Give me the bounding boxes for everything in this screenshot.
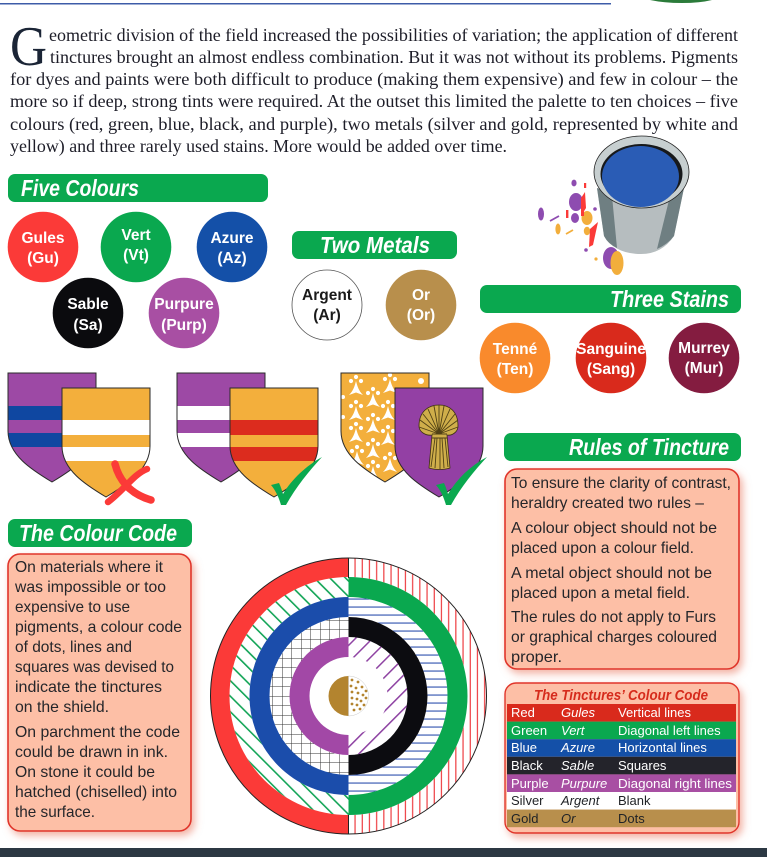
bucket body xyxy=(597,188,684,254)
circle: Tenné: Tenné xyxy=(493,341,538,358)
icon: green tick xyxy=(271,457,322,505)
heading: Five Colours xyxy=(8,174,268,202)
panel: the colour code: squares was devised to xyxy=(15,659,174,676)
circle: Sable: (Sa) xyxy=(73,317,103,334)
icon: green ornament at top edge xyxy=(650,0,712,3)
row: purple: Purpure xyxy=(561,776,607,791)
circle: Sable: Sable xyxy=(67,296,109,313)
row: gold: Or xyxy=(561,811,576,826)
row: silver: Blank xyxy=(618,793,651,808)
heading: Two Metals xyxy=(292,231,457,259)
bucket paint xyxy=(602,146,679,207)
intro paragraph: colours (red, green, blue, black, and purple), two metals (silver and gold, represented by white and xyxy=(10,114,738,135)
circle: Azure xyxy=(197,212,267,282)
circle: Azure: (Az) xyxy=(217,250,247,267)
circle: Gules: Gules xyxy=(21,230,65,247)
heading: Rules of Tincture xyxy=(504,433,741,461)
shield pair: wrong, colour on colour xyxy=(8,373,151,502)
top rule xyxy=(0,3,611,4)
circle: Tenné xyxy=(480,323,550,393)
circle: Murrey: Murrey xyxy=(678,340,730,357)
icon: green tick xyxy=(436,457,487,505)
bucket rim xyxy=(594,136,689,208)
row: blue: Blue xyxy=(511,740,537,755)
circle: Murrey xyxy=(669,323,739,393)
row: black: Sable xyxy=(561,758,594,773)
panel: rules of tincture: A colour object should not be xyxy=(511,520,717,537)
panel: rules of tincture: or graphical charges coloured xyxy=(511,629,717,646)
row: blue: Azure xyxy=(560,740,595,755)
row: red xyxy=(507,704,736,722)
row: silver: Argent xyxy=(560,793,601,808)
panel: the colour code: On stone it could be xyxy=(15,764,155,781)
row: green xyxy=(507,722,736,739)
intro paragraph: for dyes and paints were both difficult to produce (making them expensive) and few in colour – the xyxy=(10,69,738,90)
circle: Or xyxy=(386,270,456,340)
panel: the colour code: on the shield. xyxy=(15,699,109,716)
row: black: Black xyxy=(511,758,543,773)
circle: Sable xyxy=(53,278,123,348)
chart: concentric tincture code rings xyxy=(210,558,486,834)
table title: The Tinctures’ Colour Code xyxy=(534,688,708,704)
circle: Vert: (Vt) xyxy=(123,247,149,264)
intro paragraph: tinctures brought an almost endless combination. But it was not without its problems. Pigments xyxy=(50,47,738,67)
panel: rules of tincture: placed upon a metal field. xyxy=(511,585,690,602)
panel: the colour code: On materials where it xyxy=(15,559,164,576)
circle: Purpure xyxy=(149,278,219,348)
panel: rules of tincture: proper. xyxy=(511,649,562,666)
panel: the colour code: expensive to use xyxy=(15,599,130,616)
panel: rules of tincture xyxy=(505,469,739,669)
icon: paint bucket with splashes xyxy=(538,136,689,275)
row: gold: Gold xyxy=(511,811,538,826)
circle: Argent: (Ar) xyxy=(313,307,341,324)
panel: rules of tincture: A metal object should not be xyxy=(511,565,712,582)
row: blue: Horizontal lines xyxy=(618,740,707,755)
intro paragraph: more so if deep, strong tints were required. At the outset this limited the palette to ten choices – five xyxy=(10,91,738,111)
panel: rules of tincture: To ensure the clarity of contrast, xyxy=(511,475,731,492)
circle: Vert xyxy=(101,212,171,282)
panel: the colour code xyxy=(8,554,191,831)
row: purple: Diagonal right lines xyxy=(618,776,733,791)
row: green: Diagonal left lines xyxy=(618,723,721,738)
circle: Gules xyxy=(8,212,78,282)
heading: Five Colours: Five Colours xyxy=(21,175,139,201)
panel: the colour code: On parchment the code xyxy=(15,724,180,741)
row: silver xyxy=(507,792,736,810)
icon: wheat sheaf xyxy=(419,405,458,470)
panel: rules of tincture: placed upon a colour field. xyxy=(511,540,694,557)
intro paragraph: eometric division of the field increased the possibilities of variation; the application of different xyxy=(49,25,738,45)
shield pair: right, metal on colour xyxy=(177,373,322,505)
panel: the tinctures' colour code table xyxy=(505,683,739,833)
row: green: Green xyxy=(511,723,547,738)
intro paragraph xyxy=(10,16,738,157)
row: red: Vertical lines xyxy=(618,705,691,720)
circle: Or: Or xyxy=(412,287,430,304)
circle: Or: (Or) xyxy=(407,307,435,324)
panel: the colour code: could be drawn in ink. xyxy=(15,744,168,761)
row: silver: Silver xyxy=(511,793,544,808)
row: gold xyxy=(507,810,736,827)
circle: Tenné: (Ten) xyxy=(497,361,533,378)
panel: rules of tincture: heraldry created two rules – xyxy=(511,495,704,512)
intro paragraph: yellow) and three rarely used stains. More would be added over time. xyxy=(10,136,507,157)
bottom bar xyxy=(0,848,767,857)
circle: Argent xyxy=(292,270,362,340)
heading: Two Metals: Two Metals xyxy=(320,232,430,258)
shield pair: right, furs and proper charge xyxy=(341,373,487,505)
row: red: Red xyxy=(511,705,535,720)
circle: Purpure: Purpure xyxy=(154,296,214,313)
icon: red cross xyxy=(108,464,151,502)
row: green: Vert xyxy=(561,723,586,738)
panel: the colour code: was impossible or too xyxy=(14,579,166,596)
circle: Azure: Azure xyxy=(210,230,254,247)
circle: Vert: Vert xyxy=(121,227,151,244)
panel: the colour code: the surface. xyxy=(15,804,95,821)
circle: Gules: (Gu) xyxy=(27,250,59,267)
panel: rules of tincture: The rules do not apply to Furs xyxy=(511,609,716,626)
heading: The Colour Code: The Colour Code xyxy=(19,520,177,546)
drop cap: G xyxy=(10,16,47,78)
circle: Argent: Argent xyxy=(302,287,352,304)
heading: Rules of Tincture: Rules of Tincture xyxy=(569,434,729,460)
panel: the colour code: of dots, lines and xyxy=(15,639,132,656)
row: black: Squares xyxy=(618,758,667,773)
row: red: Gules xyxy=(561,705,595,720)
row: gold: Dots xyxy=(618,811,645,826)
row: black xyxy=(507,757,736,774)
panel: the colour code: pigments, a colour code xyxy=(15,619,182,636)
panel: the colour code: hatched (chiselled) into xyxy=(15,784,177,801)
circle: Sanguine xyxy=(576,323,646,393)
circle: Purpure: (Purp) xyxy=(161,317,207,334)
centre: gold and dots xyxy=(329,676,369,716)
panel: the colour code: indicate the tinctures xyxy=(15,679,162,696)
circle: Murrey: (Mur) xyxy=(685,360,723,377)
circle: Sanguine: (Sang) xyxy=(587,361,635,378)
heading: Three Stains: Three Stains xyxy=(610,286,729,312)
row: blue xyxy=(507,739,736,757)
row: purple xyxy=(507,774,736,792)
heading: Three Stains xyxy=(480,285,741,313)
circle: Sanguine: Sanguine xyxy=(576,341,646,358)
row: purple: Purple xyxy=(511,776,549,791)
